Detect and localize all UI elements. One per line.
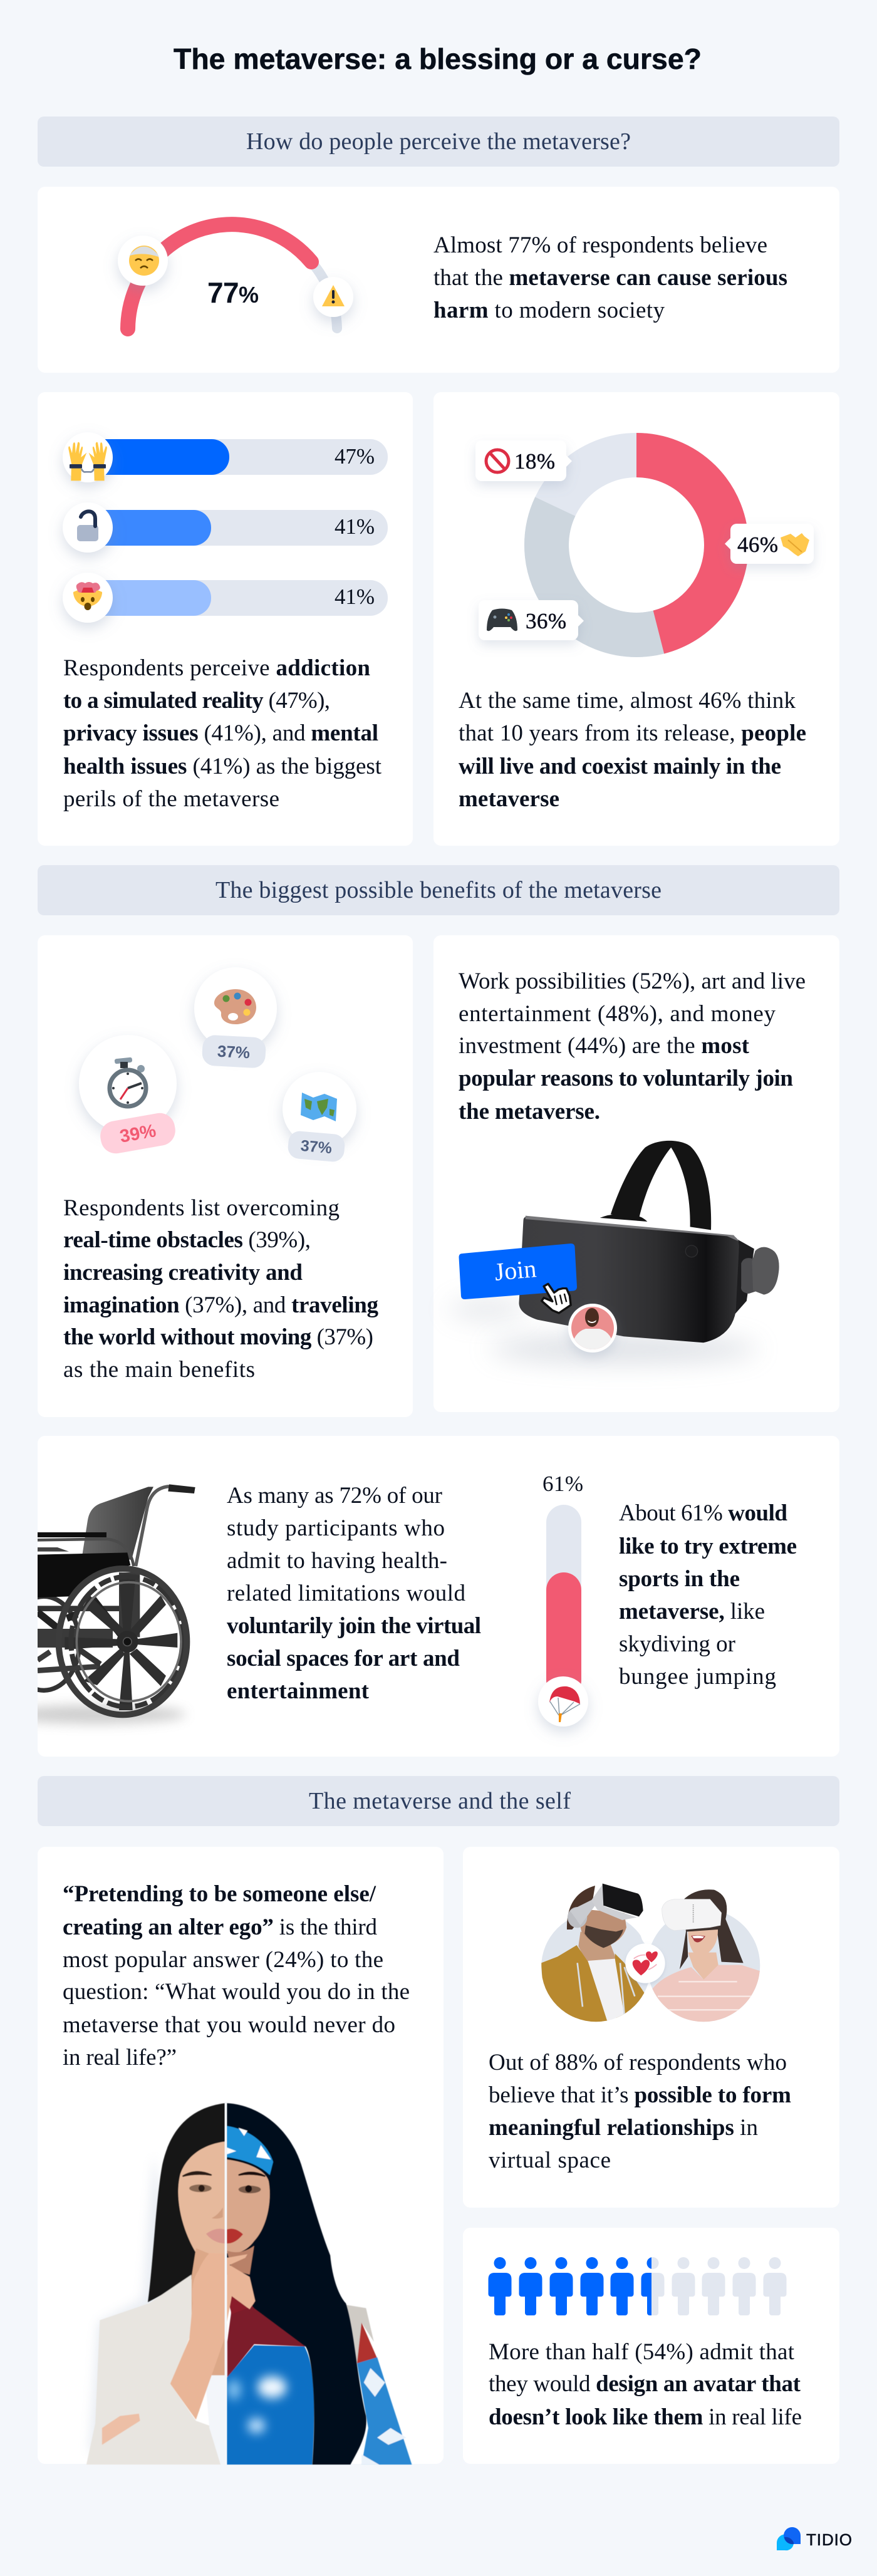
text: coexist: will live and coexist mainly in the xyxy=(459,754,781,779)
text: wheelchair finding: admit to having health- xyxy=(227,1548,447,1574)
text: relationships: meaningful relationships in xyxy=(489,2115,758,2141)
donut chart xyxy=(546,455,727,635)
section heading: benefits xyxy=(38,865,839,915)
text: avatar: they would design an avatar that xyxy=(489,2371,801,2397)
section heading: perception xyxy=(38,117,839,167)
text: coexist: At the same time, almost 46% think xyxy=(459,688,796,714)
text: wheelchair finding xyxy=(227,1483,481,1704)
text: extreme sports: bungee jumping xyxy=(619,1664,776,1690)
callout: 36% xyxy=(479,600,584,640)
text: reasons to join: popular reasons to voluntarily join xyxy=(459,1066,793,1091)
text: 77% finding: Almost 77% of respondents believe xyxy=(433,232,767,258)
text: alter ego xyxy=(63,1881,410,2070)
bar chart: perils: 41% xyxy=(335,514,375,539)
callout: 18%: 18% xyxy=(514,449,555,474)
section heading: benefits: The biggest possible benefits of the metaverse xyxy=(215,877,662,903)
icon: stopwatch with 39% xyxy=(79,1035,178,1156)
panel: donut chart xyxy=(433,392,839,846)
button: Join: Join xyxy=(494,1254,537,1286)
gauge chart xyxy=(118,224,353,329)
text: relationships xyxy=(489,2050,791,2173)
text: wheelchair finding: social spaces for art and xyxy=(227,1646,460,1671)
illustration: split-face woman xyxy=(86,2102,412,2464)
text: wheelchair finding: study participants who xyxy=(227,1515,445,1541)
section heading: the self: The metaverse and the self xyxy=(309,1788,571,1814)
text: alter ego: creating an alter ego” is the third xyxy=(63,1914,377,1940)
text: perils: privacy issues (41%), and mental xyxy=(63,720,378,746)
section heading: perception: How do people perceive the metaverse? xyxy=(246,128,631,155)
logo: Tidio: TIDIO xyxy=(806,2530,852,2549)
gauge value: 77% xyxy=(207,276,259,309)
icon: bandaged face xyxy=(118,236,168,286)
illustration: VR headset xyxy=(449,1141,779,1364)
panel: main benefits xyxy=(38,935,413,1417)
text: relationships: virtual space xyxy=(489,2148,611,2173)
text: reasons to join: investment (44%) are the most xyxy=(459,1033,750,1059)
callout: 18% xyxy=(475,440,572,481)
text: avatar: doesn’t look like them in real life xyxy=(489,2404,802,2430)
text: extreme sports xyxy=(619,1500,797,1690)
text: extreme sports: skydiving or xyxy=(619,1631,735,1657)
text: reasons to join: Work possibilities (52%), art and live xyxy=(459,969,806,994)
text: reasons to join xyxy=(459,969,806,1124)
text: alter ego: “Pretending to be someone else/ xyxy=(63,1881,376,1907)
text: extreme sports: like to try extreme xyxy=(619,1534,797,1559)
text: avatar xyxy=(489,2339,802,2430)
icon: world map with 37%: 37% xyxy=(300,1137,333,1157)
text: extreme sports: sports in the xyxy=(619,1566,740,1592)
icon: handcuffed hands xyxy=(63,432,113,482)
panel: reasons to join xyxy=(433,935,839,1412)
text: main benefits: the world without moving (37%) xyxy=(63,1324,373,1350)
text: coexist: that 10 years from its release, people xyxy=(459,720,806,746)
text: perils: Respondents perceive addiction xyxy=(63,655,370,681)
text: extreme sports: metaverse, like xyxy=(619,1599,765,1624)
text: relationships: Out of 88% of respondents who xyxy=(489,2050,787,2075)
illustration: couple in VR xyxy=(541,1884,761,2025)
icon: palette with 37%: 37% xyxy=(217,1042,251,1062)
text: main benefits: as the main benefits xyxy=(63,1357,255,1383)
text: wheelchair finding: entertainment xyxy=(227,1678,370,1704)
text: main benefits: increasing creativity and xyxy=(63,1260,303,1285)
panel: avatar xyxy=(463,2228,839,2464)
section heading: the self xyxy=(38,1776,839,1826)
text: perils xyxy=(63,655,382,812)
logo: Tidio xyxy=(777,2527,852,2550)
panel: alter ego xyxy=(38,1847,444,2464)
icon: hand cursor xyxy=(542,1284,571,1313)
text: 77% finding xyxy=(433,232,787,323)
text: perils: perils of the metaverse xyxy=(63,786,279,812)
text: alter ego: in real life?” xyxy=(63,2045,177,2070)
text: avatar: More than half (54%) admit that xyxy=(489,2339,795,2365)
text: wheelchair finding: As many as 72% of our xyxy=(227,1483,442,1509)
chart: 61% thermometer xyxy=(538,1472,588,1727)
panel: wheelchair and thermometer xyxy=(6,1436,839,1757)
text: coexist xyxy=(459,688,806,812)
panel: relationships xyxy=(463,1847,839,2208)
bar chart: perils: 41% xyxy=(335,584,375,609)
text: alter ego: most popular answer (24%) to the xyxy=(63,1947,383,1973)
text: extreme sports: About 61% would xyxy=(619,1500,787,1526)
avatar: smiling man xyxy=(568,1304,617,1353)
text: wheelchair finding: voluntarily join the virtual xyxy=(227,1613,481,1639)
icon: warning sign xyxy=(313,277,353,317)
text: reasons to join: the metaverse. xyxy=(459,1099,600,1124)
text: 77% finding: harm to modern society xyxy=(433,298,665,323)
callout: 36%: 36% xyxy=(526,609,566,633)
icon: hearts bubble xyxy=(625,1943,665,1983)
bar chart: perils xyxy=(63,432,388,623)
text: alter ego: question: “What would you do in the xyxy=(63,1979,410,2005)
icon: world map with 37% xyxy=(283,1072,356,1163)
callout: 46% xyxy=(725,524,814,564)
text: reasons to join: entertainment (48%), and money xyxy=(459,1001,776,1027)
text: 77% finding: that the metaverse can cause serious xyxy=(433,265,787,291)
text: alter ego: metaverse that you would never do xyxy=(63,2012,395,2038)
text: relationships: believe that it’s possible to form xyxy=(489,2082,791,2108)
title: The metaverse: a blessing or a curse? xyxy=(174,43,702,75)
pictogram: 54% of people xyxy=(489,2257,787,2315)
text: main benefits xyxy=(63,1195,378,1383)
icon: parachute xyxy=(538,1676,588,1727)
text: coexist: metaverse xyxy=(459,786,559,812)
illustration: wheelchair xyxy=(38,1484,195,1729)
icon: stopwatch with 39%: 39% xyxy=(118,1121,158,1147)
icon: open lock xyxy=(63,502,113,553)
text: perils: health issues (41%) as the biggest xyxy=(63,754,382,779)
text: wheelchair finding: related limitations would xyxy=(227,1581,466,1606)
icon: mind blown xyxy=(63,573,113,623)
bar chart: perils: 47% xyxy=(335,444,375,469)
text: main benefits: imagination (37%), and traveling xyxy=(63,1292,378,1318)
text: main benefits: real-time obstacles (39%), xyxy=(63,1227,311,1253)
callout: 46%: 46% xyxy=(737,532,778,557)
chart: 61% thermometer: 61% xyxy=(542,1472,583,1496)
panel: 77% gauge xyxy=(38,187,839,373)
text: perils: to a simulated reality (47%), xyxy=(63,688,330,714)
icon: palette with 37% xyxy=(194,967,277,1069)
panel: biggest perils xyxy=(38,392,413,846)
text: main benefits: Respondents list overcoming xyxy=(63,1195,340,1221)
button: Join xyxy=(460,1245,576,1298)
